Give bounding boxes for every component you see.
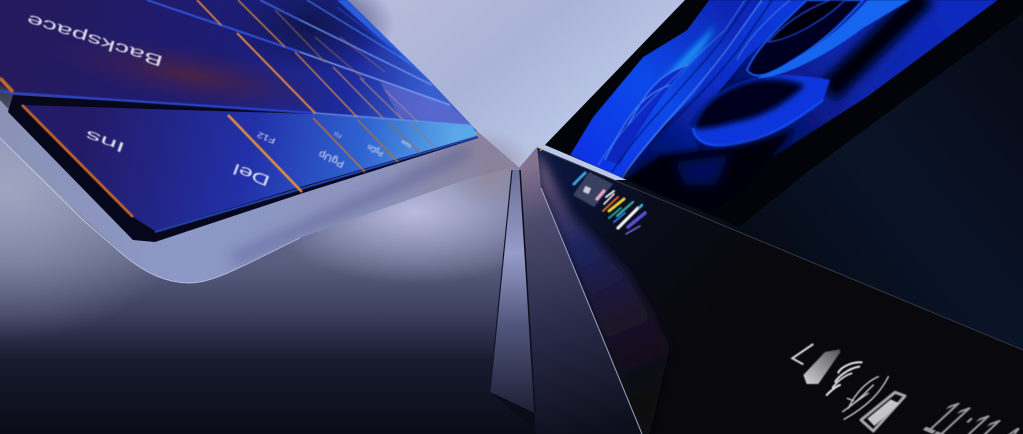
right blue mass [693,0,998,160]
F12: F12 [255,129,277,145]
purple glow panel [536,148,670,434]
dark gap in lower left [623,126,796,194]
inner dark loop [768,0,845,42]
icon: wifi [827,362,862,395]
display [545,0,1023,227]
F11: F11 [333,130,343,139]
front key row [22,105,477,231]
upper key rows [0,0,478,132]
row gaps [0,0,470,125]
orange key gaps [0,0,435,217]
middle blue region [622,0,807,180]
icon: battery [861,392,905,431]
orange indicator [540,148,543,151]
Ins: Ins [83,127,127,156]
key labels [25,10,413,189]
icon: volume [843,377,888,419]
light purple far keys [380,82,470,124]
Home: Home [400,138,413,148]
PgDn: PgDn [366,142,385,158]
cyan highlight [661,26,716,82]
dark inside of fold [693,79,805,129]
screen bezel lower area [536,148,1023,434]
laptop base surface [0,40,565,434]
edge highlight [541,188,642,434]
fold rim [693,100,823,145]
sky background [320,0,720,180]
left blue bands [570,0,760,178]
wallpaper [570,0,998,202]
keyboard [0,0,478,242]
Del: Del [231,160,272,189]
black screen border [545,0,1023,227]
brown reflection [37,19,343,131]
dark valley [828,0,925,92]
bright blue top rim [337,0,432,83]
lit fold floor [693,75,830,145]
dark far keys [225,0,395,75]
back dark panel [700,0,1023,352]
hinge groove [490,170,535,413]
app pills [574,173,645,234]
key well shadow [8,95,478,242]
black bezel [537,148,1023,434]
icon: chevron [792,344,813,364]
upper dark loop [747,0,863,75]
icon: user glyph [803,349,840,384]
strip right of hinge [519,147,642,434]
status bar icons [792,344,1023,434]
bright front edge [155,137,477,232]
bright band under loop [757,0,910,78]
widget panel [573,172,613,207]
keyboard well lip [0,100,513,283]
left loops [605,85,670,165]
fine fold lines [598,0,790,178]
small app bar on laptop screen [573,172,645,234]
Backspace: Backspace [25,10,165,69]
PgUp: PgUp [317,148,346,169]
